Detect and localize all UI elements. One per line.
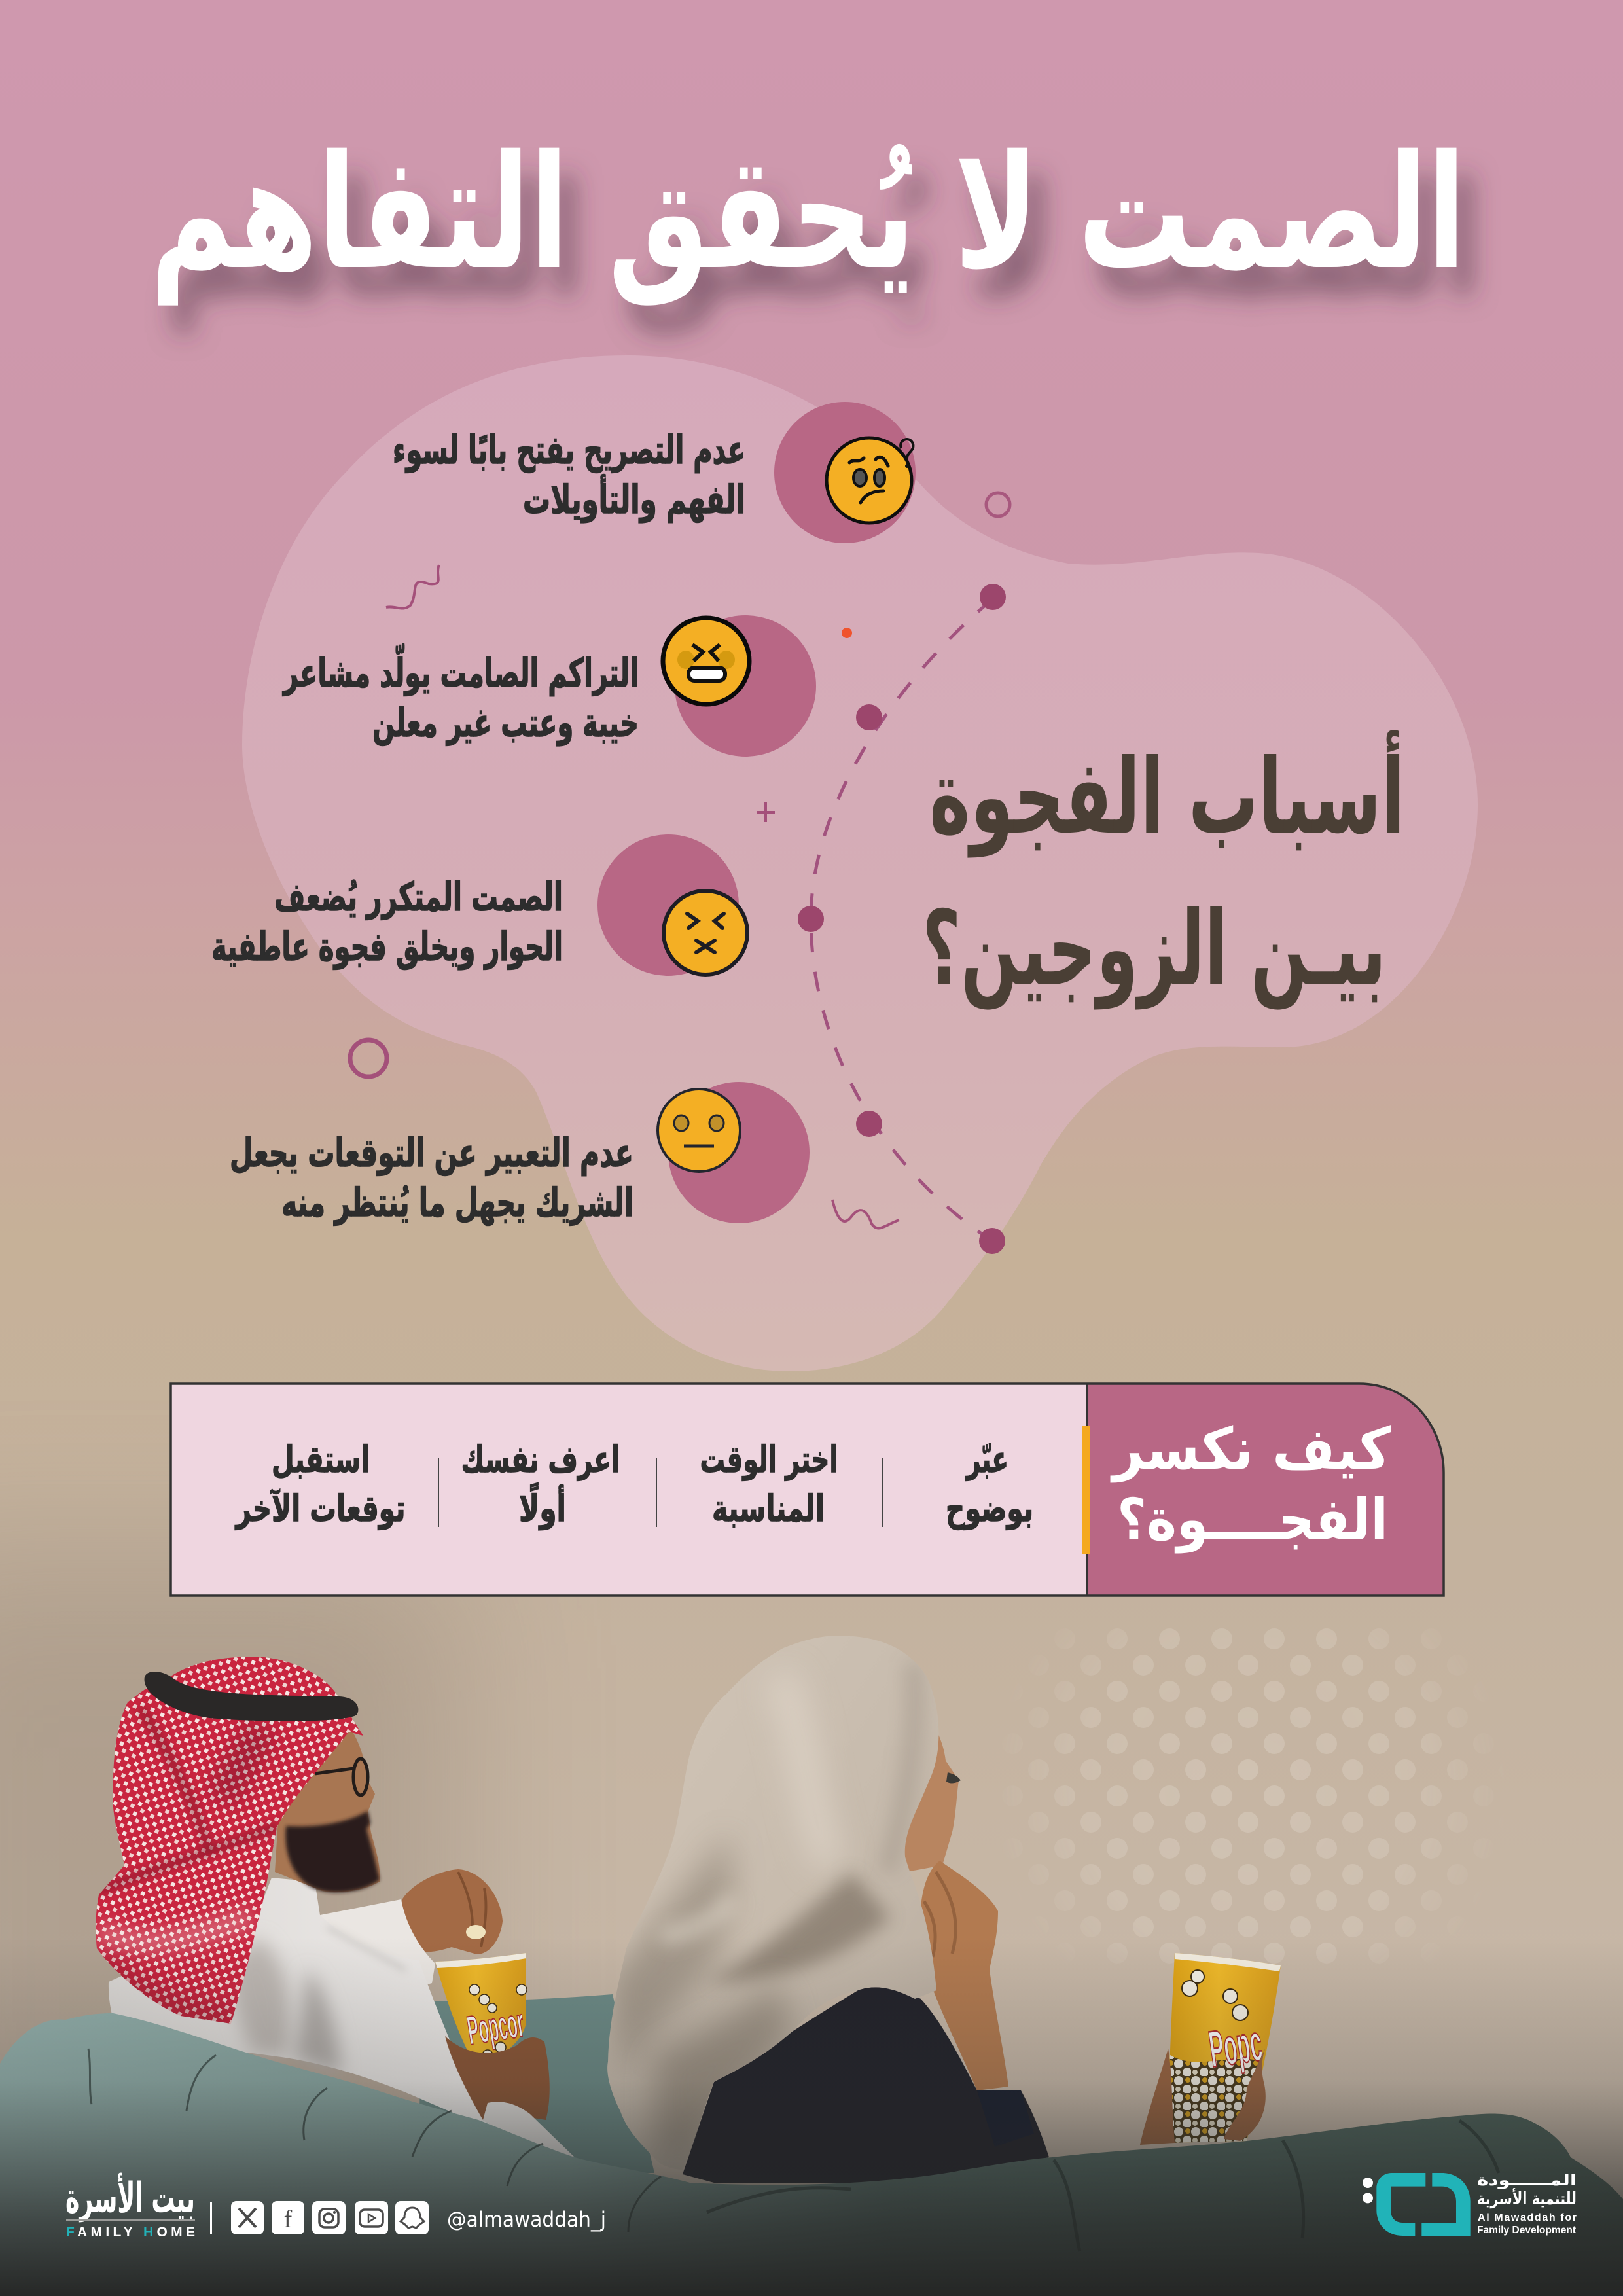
bottom dark fade [0, 1937, 1623, 2296]
cause 3 [211, 834, 747, 976]
icon: snapchat [395, 2201, 429, 2234]
icon: confused face [827, 438, 913, 523]
decorative ring large [350, 1040, 387, 1077]
heading: causes of the gap: أسباب الفجوة [929, 730, 1405, 858]
man: popcorn hand [401, 1869, 503, 1954]
heading: causes of the gap [922, 730, 1405, 1010]
tip: express clearly: بوضوح [946, 1488, 1033, 1530]
woman: abaya [683, 1987, 1049, 2183]
dashed arc timeline [798, 584, 1006, 1254]
logo text [1477, 2171, 1577, 2236]
logo text: Al Mawaddah for [1478, 2212, 1577, 2223]
cause 4 text: الشريك يجهل ما يُنتظر منه [281, 1180, 633, 1226]
cause 4 text: عدم التعبير عن التوقعات يجعل [230, 1130, 633, 1176]
tip: express clearly: عبّر [965, 1439, 1008, 1481]
man: hand holding cup [445, 2036, 550, 2120]
tip: know yourself first: اعرف نفسك [461, 1439, 620, 1481]
panel: causes blob [211, 355, 1478, 1371]
halftone dot pattern [1055, 1628, 1442, 1964]
woman's cup: popcorn print [1168, 2055, 1262, 2143]
icon: facebook: f [284, 2206, 293, 2233]
cause 1 text [393, 427, 745, 523]
cause 3 text [211, 874, 563, 970]
icon: instagram [312, 2201, 346, 2234]
woman: beige hijab [607, 1636, 938, 2170]
social icons [231, 2201, 429, 2234]
cause 3 circle [597, 834, 739, 976]
cause 1 circle [774, 402, 916, 543]
man: popcorn cup [435, 1953, 527, 2065]
cause 2 text: التراكم الصامت يولّد مشاعر [282, 644, 639, 696]
woman in hijab and abaya [607, 1636, 1281, 2183]
man: neck and face [275, 1728, 380, 1892]
woman: hand and forearm [921, 1861, 1008, 2090]
footer: al mawaddah logo [1363, 2171, 1577, 2236]
tip: know yourself first: أولًا [519, 1482, 566, 1530]
panel light area [171, 1384, 1087, 1596]
man: far sleeve [320, 1899, 435, 1990]
footer divider [210, 2202, 212, 2234]
icon: squinting face [663, 618, 749, 704]
tip: receive the other's expectations [234, 1439, 406, 1530]
tip: choose the right time [700, 1439, 838, 1530]
sofa back behind the couple [419, 1994, 654, 2173]
cause 2 circle [675, 615, 816, 757]
cause 1 [393, 402, 916, 543]
decorative plus [757, 802, 775, 822]
panel: how to break the gap [171, 1384, 1444, 1596]
man in thobe and shemagh: Popcor [464, 2000, 527, 2054]
footer: family home logo [65, 2172, 195, 2240]
decorative squiggle top [386, 565, 439, 609]
icon: neutral face [658, 1089, 740, 1172]
cause 1 text: عدم التصريح يفتح بابًا لسوء [393, 427, 745, 473]
man: black igal [145, 1672, 358, 1721]
logo text: للتنمية الأسرية [1477, 2188, 1577, 2209]
photo: couple on a sofa watching with popcorn [0, 1623, 1623, 2296]
footer: family home logo: F AMILY H OME [66, 2225, 195, 2240]
tip: know yourself first [461, 1439, 620, 1530]
cause 4 circle [668, 1082, 810, 1223]
tip: receive the other's expectations: توقعات الآخر [234, 1488, 406, 1530]
man: thobe body [109, 1878, 517, 2140]
panel heading: الفجــــوة؟ [1117, 1486, 1388, 1554]
heading: causes of the gap: بيـن الزوجين؟ [922, 889, 1386, 1010]
front sofa cushion [0, 2013, 1623, 2296]
separators [438, 1458, 882, 1527]
panel heading: كيف نكسر [1110, 1415, 1391, 1482]
cause 4 text [230, 1130, 633, 1226]
tip: choose the right time: اختر الوقت [700, 1439, 838, 1481]
cause 4 [230, 1082, 810, 1226]
orange accent bar [1082, 1426, 1090, 1554]
woman: face [897, 1702, 959, 1872]
icon: X [231, 2201, 264, 2234]
cause 2 text: خيبة وعتب غير معلن [372, 700, 639, 746]
cause 2 [282, 615, 816, 757]
blob shape [242, 355, 1478, 1371]
footer: family home logo: بيت الأسرة [65, 2172, 195, 2223]
man: shemagh headdress [92, 1649, 373, 2029]
decorative orange dot [842, 628, 852, 638]
tip: express clearly [946, 1439, 1033, 1530]
cause 2 text [282, 644, 639, 746]
cause 3 text: الصمت المتكرر يُضعف [274, 874, 563, 920]
panel dark heading area [1087, 1384, 1444, 1596]
panel heading [1110, 1415, 1391, 1554]
woman: popcorn cup and hand: Popc [1205, 2014, 1266, 2078]
man: beard [285, 1811, 380, 1892]
icon: sealed face [664, 891, 747, 975]
tip: receive the other's expectations: استقبل [272, 1439, 370, 1481]
icon: facebook [272, 2201, 304, 2234]
logo mark [1363, 2173, 1471, 2236]
icon: youtube [355, 2201, 388, 2234]
man: glasses [315, 1759, 368, 1795]
decorative ring small [986, 493, 1010, 516]
social handle: @almawaddah_j [447, 2207, 606, 2232]
logo text: Family Development [1477, 2225, 1577, 2236]
man in thobe and shemagh [92, 1649, 575, 2157]
decorative squiggle bottom [832, 1200, 899, 1228]
panel outline [171, 1384, 1444, 1596]
cause 1 text: الفهم والتأويلات [523, 474, 745, 523]
logo text: المــــــودة [1477, 2171, 1577, 2189]
tip: choose the right time: المناسبة [712, 1488, 825, 1530]
cause 3 text: الحوار ويخلق فجوة عاطفية [211, 924, 563, 970]
woman: popcorn cup and hand [1140, 1953, 1281, 2145]
